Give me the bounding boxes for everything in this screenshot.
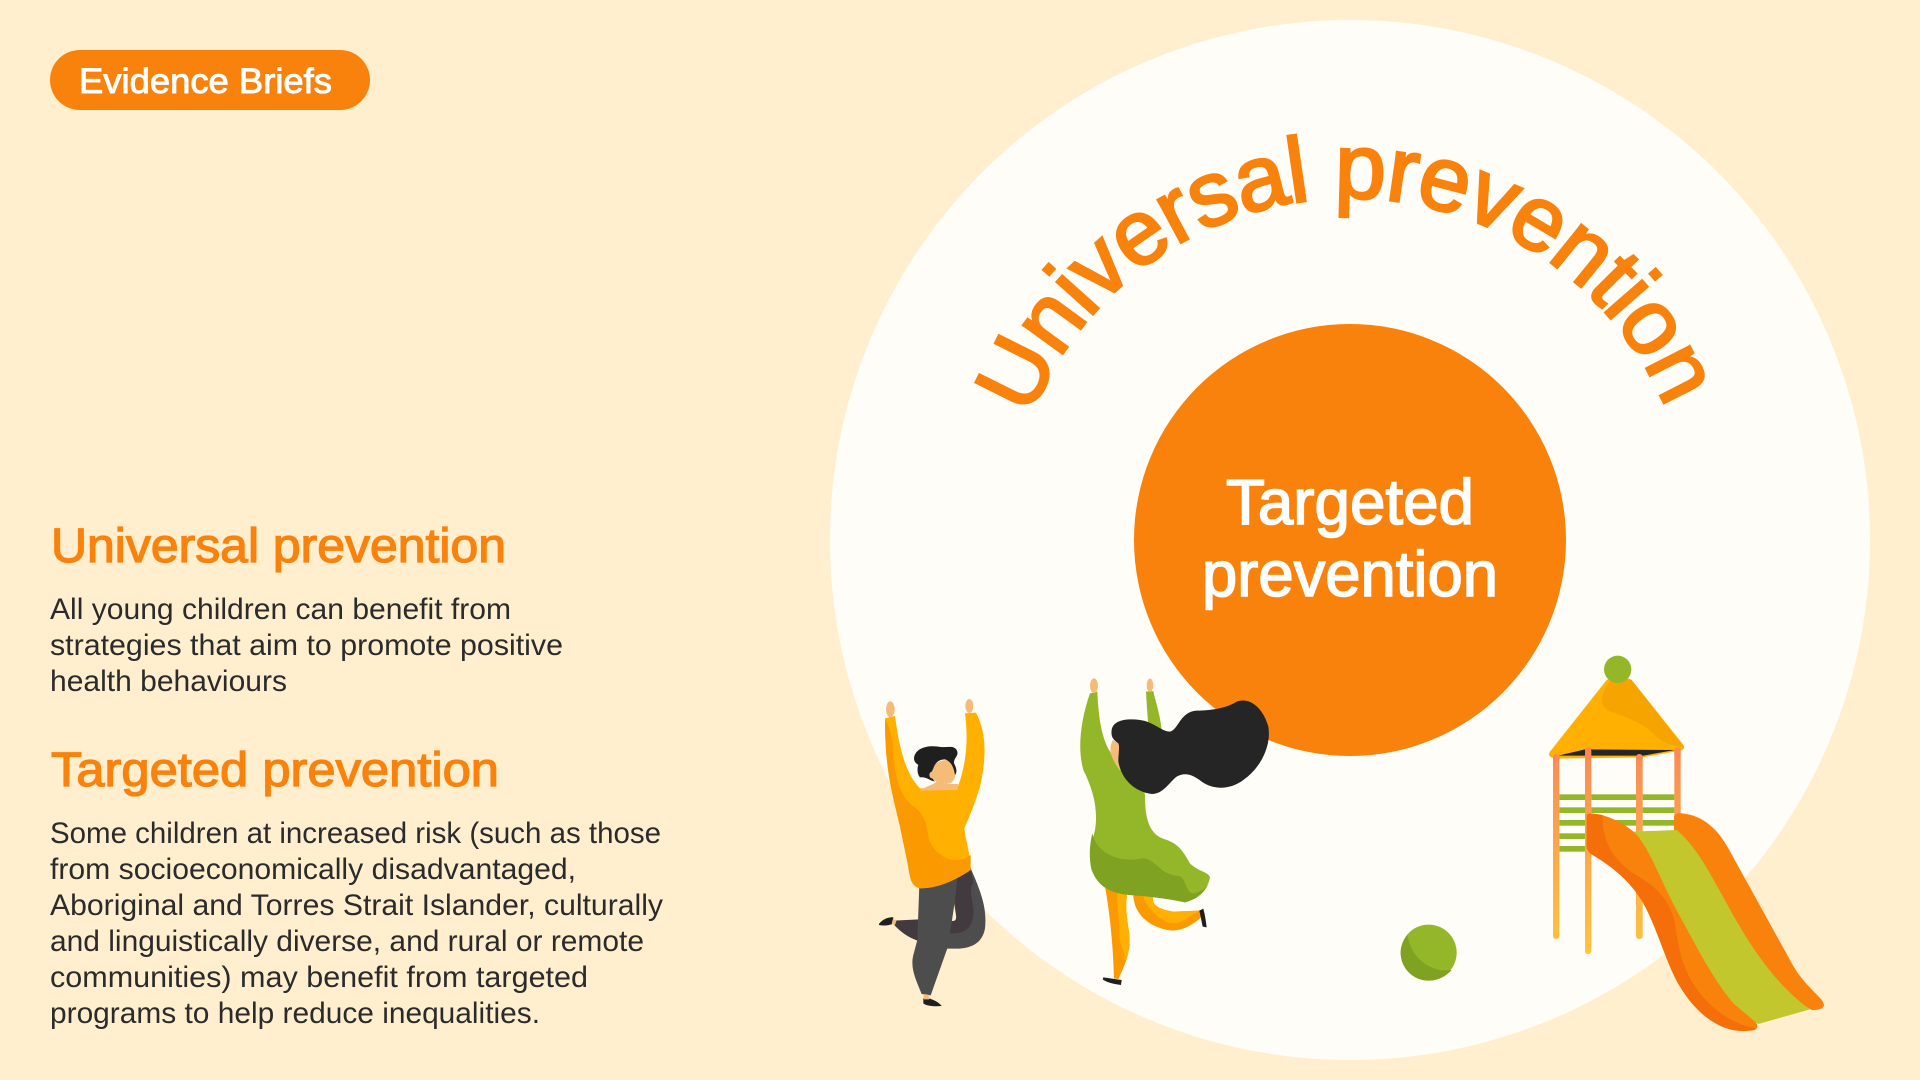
diagram: inner targeted circle: Targeted [1226, 466, 1474, 538]
diagram: inner targeted circle [1134, 324, 1566, 756]
badge: Evidence Briefs: Evidence Briefs [79, 62, 332, 101]
icon: green ball [1401, 925, 1457, 981]
text block: targeted description: and linguistically diverse, and rural or remote [50, 925, 644, 958]
text block: universal description: All young children can benefit from [50, 593, 511, 626]
text block: targeted description: from socioeconomically disadvantaged, [50, 853, 576, 886]
text block: targeted description: communities) may benefit from targeted [50, 961, 588, 994]
curved label: Universal prevention: Universal prevention [974, 134, 1705, 405]
roof [1549, 656, 1684, 762]
illustration: dancing woman [1080, 678, 1269, 985]
diagram: inner targeted circle: prevention [1202, 538, 1498, 610]
text block: targeted description: Some children at increased risk (such as those [50, 817, 661, 850]
heading: Targeted prevention: Targeted prevention [51, 744, 499, 797]
rungs [1559, 794, 1674, 852]
text block: universal description [50, 593, 563, 698]
slide chute [1587, 813, 1824, 1031]
posts [1553, 747, 1681, 954]
text block: universal description: health behaviours [50, 665, 287, 698]
text block: universal description: strategies that aim to promote positive [50, 629, 563, 662]
illustration: playground slide [1549, 656, 1824, 1031]
text block: targeted description: programs to help reduce inequalities. [50, 997, 540, 1030]
diagram: outer universal circle [830, 20, 1870, 1060]
heading: Universal prevention: Universal prevention [51, 520, 506, 573]
illustration: dancing man [879, 699, 985, 1006]
text block: targeted description: Aboriginal and Torres Strait Islander, culturally [50, 889, 663, 922]
badge: Evidence Briefs [50, 50, 370, 110]
panel: explanatory text [50, 520, 663, 1030]
text block: targeted description [50, 817, 663, 1030]
